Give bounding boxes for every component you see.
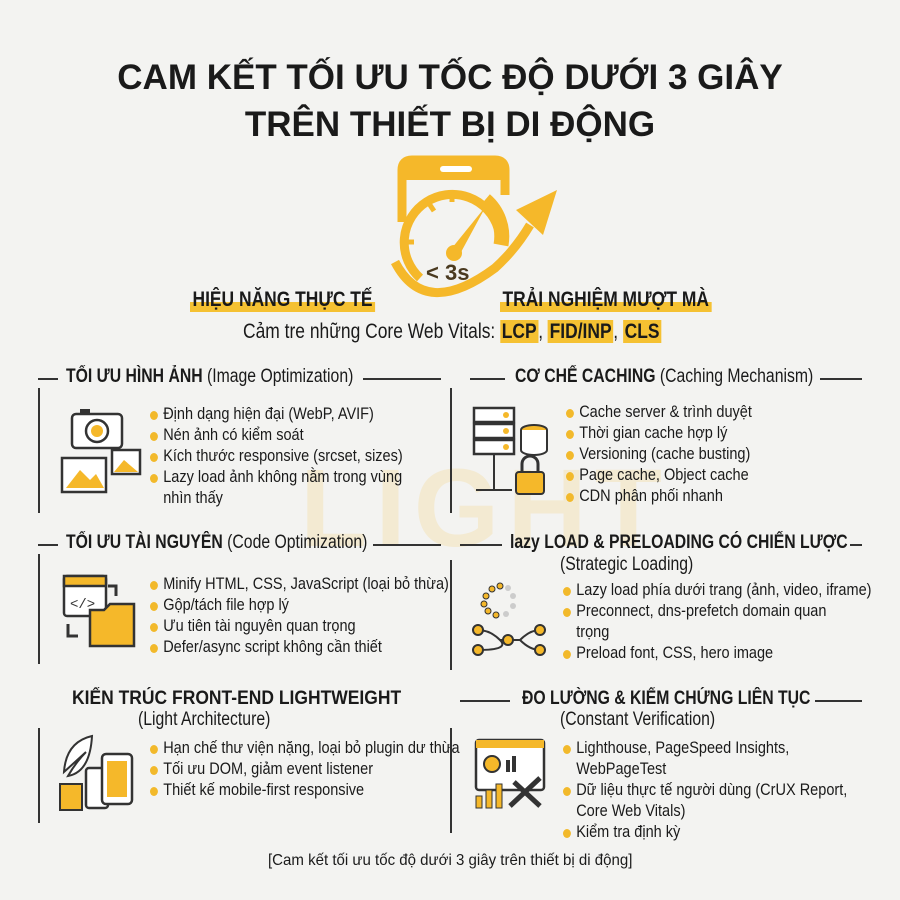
list: CDN phân phối nhanh <box>579 487 723 505</box>
list <box>563 739 847 841</box>
list: Gộp/tách file hợp lý <box>163 596 289 614</box>
list: Cache server & trình duyệt <box>579 403 752 421</box>
subheading: (Light Architecture) <box>138 709 270 730</box>
list <box>150 575 449 656</box>
list: Thời gian cache hợp lý <box>579 424 727 442</box>
subtitle: Cảm tre những Core Web Vitals: LCP, FID/INP, CLS <box>243 320 659 343</box>
list <box>563 581 871 662</box>
list: Dữ liệu thực tế người dùng (CrUX Report, <box>576 781 847 799</box>
panel: strategic loading <box>450 531 871 670</box>
list: Hạn chế thư viện nặng, loại bỏ plugin dư thừa <box>163 739 460 757</box>
list: Kiểm tra định kỳ <box>576 823 680 841</box>
icon: feather and devices <box>59 734 134 811</box>
list: Core Web Vitals) <box>576 802 685 820</box>
icon: code folders: </> <box>70 597 95 613</box>
list: WebPageTest <box>576 760 666 778</box>
list: Defer/async script không cần thiết <box>163 638 382 656</box>
highlight: experience: TRẢI NGHIỆM MƯỢT MÀ <box>502 288 709 311</box>
heading: CƠ CHẾ CACHING (Caching Mechanism) <box>515 366 813 387</box>
watermark: LIGHT <box>300 447 670 570</box>
heading: lazy LOAD & PRELOADING CÓ CHIẾN LƯỢC <box>510 532 848 553</box>
list: Lazy load ảnh không nằm trong vùng <box>163 468 402 486</box>
subheading: (Strategic Loading) <box>560 554 693 575</box>
list: Kích thước responsive (srcset, sizes) <box>163 447 403 465</box>
heading: TỐI ƯU TÀI NGUYÊN (Code Optimization) <box>66 532 367 553</box>
list <box>150 405 403 507</box>
list: Versioning (cache busting) <box>579 445 750 463</box>
highlight: performance: HIỆU NĂNG THỰC TẾ <box>192 288 373 311</box>
list: nhìn thấy <box>163 489 223 507</box>
list <box>566 403 752 505</box>
list <box>150 739 460 799</box>
list: Preload font, CSS, hero image <box>576 644 773 662</box>
panel: caching <box>450 365 862 513</box>
list: Preconnect, dns-prefetch domain quan <box>576 602 826 620</box>
icon: camera and images <box>60 409 142 494</box>
icon: phone speedometer <box>391 156 557 298</box>
list: Page cache, Object cache <box>579 466 749 484</box>
list: Ưu tiên tài nguyên quan trọng <box>163 617 356 635</box>
icon: phone speedometer: < 3s <box>426 260 469 285</box>
heading: ĐO LƯỜNG & KIỂM CHỨNG LIÊN TỤC <box>522 688 810 709</box>
list: Thiết kế mobile-first responsive <box>163 781 364 799</box>
list: Tối ưu DOM, giảm event listener <box>163 760 373 778</box>
panel: verification <box>450 687 862 841</box>
panel: light architecture <box>38 687 460 823</box>
list: Nén ảnh có kiểm soát <box>163 426 304 444</box>
title line 2: TRÊN THIẾT BỊ DI ĐỘNG <box>245 105 655 144</box>
icon: server database lock <box>472 406 548 495</box>
panel: code optimization <box>38 531 449 664</box>
icon: dashboard and tools <box>474 738 546 808</box>
panel: image optimization <box>38 365 441 513</box>
heading: KIẾN TRÚC FRONT-END LIGHTWEIGHT <box>72 688 401 709</box>
list: Lazy load phía dưới trang (ảnh, video, iframe) <box>576 581 871 599</box>
list: Minify HTML, CSS, JavaScript (loại bỏ thừa) <box>163 575 449 593</box>
subheading: (Constant Verification) <box>560 709 715 730</box>
footer: [Cam kết tối ưu tốc độ dưới 3 giây trên thiết bị di động] <box>268 852 632 869</box>
title: CAM KẾT TỐI ƯU TỐC ĐỘ DƯỚI 3 GIÂY <box>117 58 783 97</box>
heading: TỐI ƯU HÌNH ẢNH (Image Optimization) <box>66 366 353 387</box>
icon: code folders <box>62 574 136 648</box>
icon: spinner and nodes <box>472 582 546 656</box>
list: Định dạng hiện đại (WebP, AVIF) <box>163 405 374 423</box>
list: trọng <box>576 623 609 641</box>
list: Lighthouse, PageSpeed Insights, <box>576 739 789 757</box>
